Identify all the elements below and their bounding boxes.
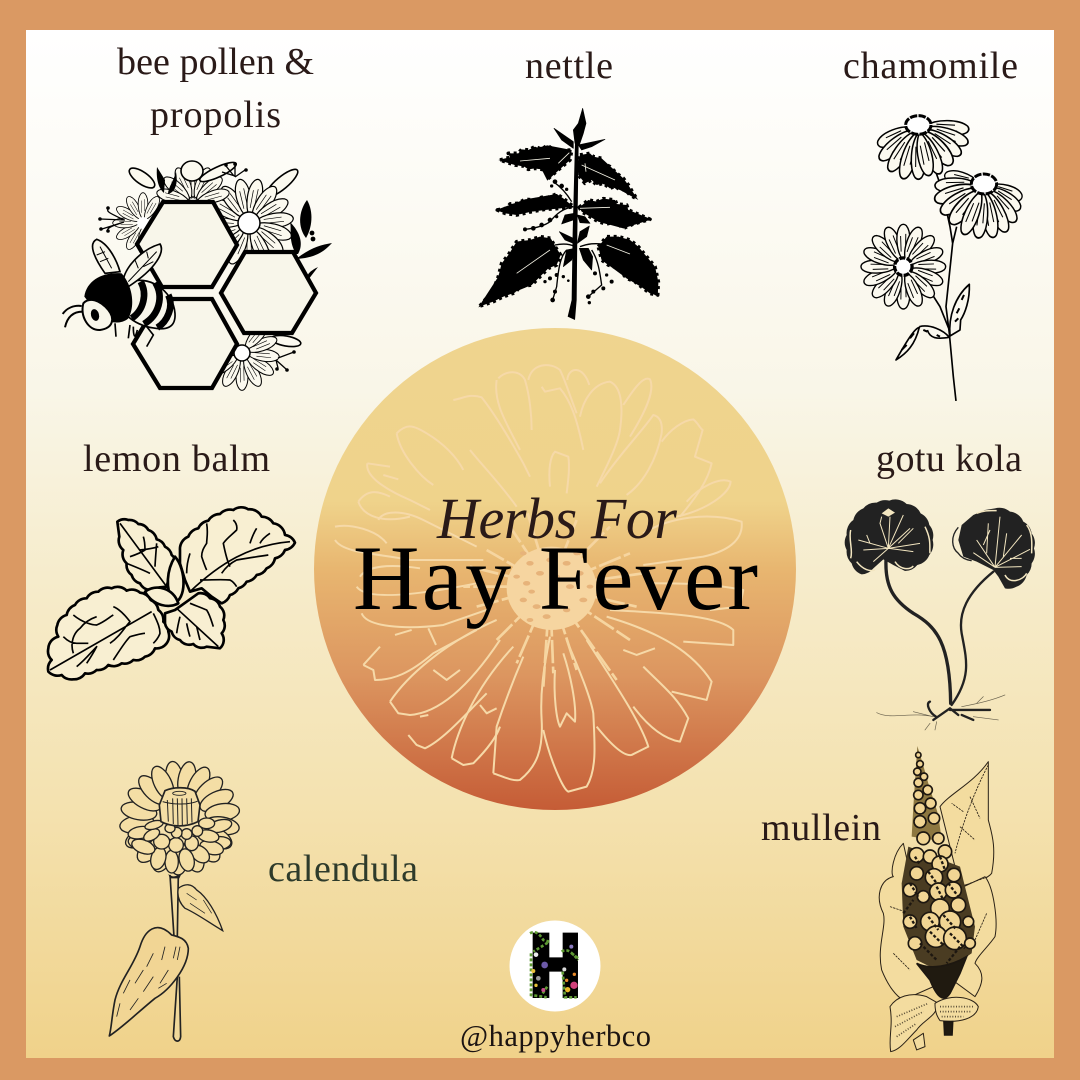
gotu kola right leaf: [958, 508, 1035, 589]
gotu kola left leaf: [845, 499, 933, 574]
central flower outline: [335, 365, 743, 792]
label: chamomile: chamomile: [843, 45, 1018, 87]
nettle solid leaf bodies: [478, 145, 658, 307]
title line: Herbs For: Herbs For: [436, 486, 677, 551]
icon: mullein: [879, 746, 996, 1052]
nettle large serrated leaves: [480, 145, 658, 306]
label: calendula: calendula: [268, 848, 418, 890]
mullein flower spike: [902, 746, 975, 1035]
handle text: @happyherbco: [460, 1019, 651, 1053]
label: gotu kola: gotu kola: [876, 438, 1022, 480]
mullein leaf veins: [890, 765, 988, 970]
gotu kola right leaf back rim: [953, 527, 972, 561]
nettle veins: [517, 153, 630, 273]
icon: gotu kola: [845, 499, 1035, 730]
label: lemon balm: lemon balm: [83, 438, 270, 480]
lemon balm upper left leaf: [117, 519, 177, 590]
icon: chamomile: [861, 116, 1024, 401]
logo foliage: [530, 932, 578, 997]
logo badge: [510, 920, 600, 1012]
nettle stem: [568, 143, 579, 320]
calendula upper leaf: [178, 885, 223, 931]
gotu kola stems: [877, 560, 1005, 730]
mullein back leaves: [879, 762, 996, 1052]
gotu kola veins: [850, 508, 1032, 581]
chamomile drooping flower two: [932, 168, 1024, 239]
bee: [63, 239, 175, 347]
label: nettle: nettle: [525, 45, 613, 87]
label: bee pollen and propolis: [117, 41, 314, 136]
calendula inner petal rows: [127, 817, 233, 873]
icon: calendula: [109, 760, 241, 1041]
label: bee pollen and propolis: bee pollen &: [117, 41, 314, 83]
chamomile drooping flower one: [875, 116, 970, 181]
calendula central cup: [159, 788, 200, 826]
logo white circle: [510, 920, 600, 1012]
chamomile leaves: [896, 284, 969, 360]
mullein flower shading: [903, 857, 965, 963]
label: bee pollen and propolis: propolis: [150, 94, 281, 136]
icon: bee and honeycomb: [63, 159, 332, 390]
nettle branches and catkins: [525, 182, 603, 300]
chamomile open flower: [861, 224, 946, 309]
lemon balm lower left leaf: [48, 587, 169, 679]
lemon balm centre bud: [168, 557, 184, 603]
title line: Hay Fever: Hay Fever: [353, 527, 758, 629]
calendula stem: [170, 875, 181, 1041]
lemon balm lower right leaf: [165, 593, 225, 648]
title: [353, 486, 758, 629]
nettle small leaves: [554, 108, 605, 270]
icon: nettle: [478, 108, 658, 320]
label: mullein: mullein: [761, 807, 881, 849]
lemon balm upper right leaf: [180, 507, 295, 603]
sprigs: [100, 165, 294, 369]
logo letter H: [533, 933, 578, 998]
mullein leaf stipple: [895, 1003, 973, 1037]
calendula outer petals: [119, 760, 241, 875]
honeycomb hexagons: [133, 202, 316, 388]
calendula lower leaf: [109, 928, 188, 1036]
flower centre: [507, 547, 597, 630]
black leaves: [157, 167, 332, 280]
icon: lemon balm: [48, 507, 295, 679]
central gradient circle: [314, 328, 796, 810]
flower petals: [335, 365, 743, 792]
lemon balm veins: [50, 520, 290, 670]
flowers behind honeycomb: [113, 159, 302, 390]
chamomile stems: [927, 165, 957, 401]
